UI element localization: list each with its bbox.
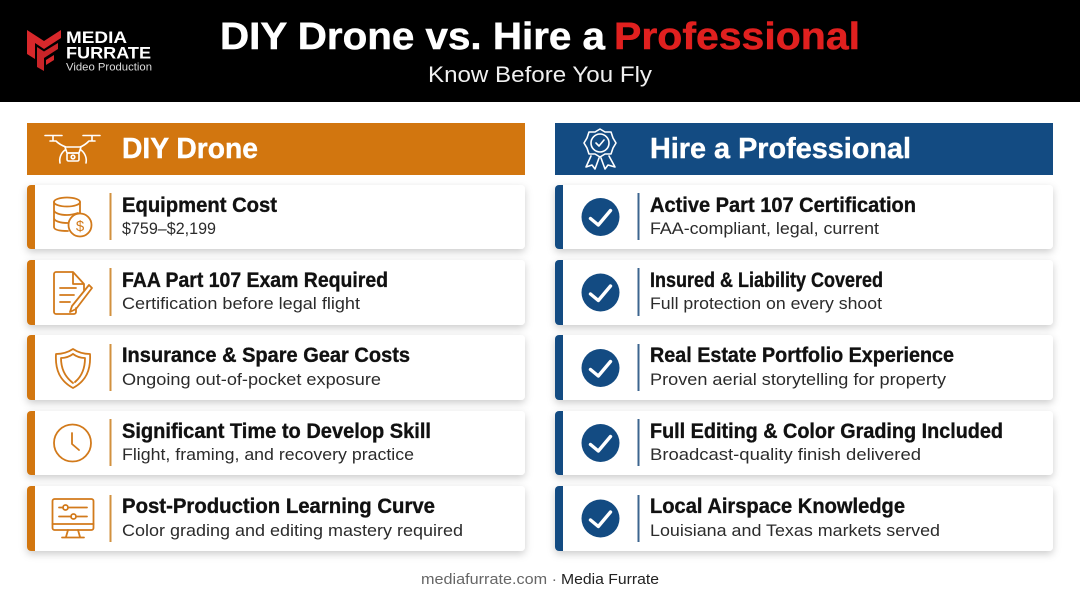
text: Significant Time to Develop Skill <box>122 420 431 443</box>
icon: document and pencil <box>54 272 92 314</box>
header band <box>0 0 1080 102</box>
heading: DIY Drone: DIY Drone <box>122 133 258 165</box>
text: Proven aerial storytelling for property <box>650 370 947 389</box>
card: Real Estate <box>555 335 1053 400</box>
text: Full Editing & Color Grading Included <box>650 420 1003 443</box>
logo mark <box>27 30 61 71</box>
icon: award ribbon <box>584 129 616 169</box>
heading: Hire a Professional <box>555 123 1053 175</box>
logo wordmark: FURRATE <box>66 44 151 62</box>
text <box>650 269 883 313</box>
footer <box>421 571 659 588</box>
text: Equipment Cost <box>122 194 277 217</box>
text: Insured & Liability Covered <box>650 269 883 292</box>
text: Insurance & Spare Gear Costs <box>122 344 410 367</box>
text <box>122 194 277 238</box>
icon: shield <box>56 349 90 388</box>
icon: coins <box>54 198 92 236</box>
text: Broadcast-quality finish delivered <box>650 445 921 464</box>
panel: Hire a Professional <box>555 123 1053 551</box>
icon: monitor with sliders <box>52 499 94 538</box>
text: $759–$2,199 <box>122 219 216 238</box>
text: Active Part 107 Certification <box>650 194 916 217</box>
text: Ongoing out-of-pocket exposure <box>122 370 381 389</box>
text <box>122 344 410 389</box>
card: Local Airspace <box>555 486 1053 551</box>
text <box>122 420 431 464</box>
logo wordmark: MEDIA <box>66 28 127 47</box>
text <box>650 194 916 238</box>
icon: drone <box>45 136 100 163</box>
text <box>122 495 463 540</box>
text <box>650 344 954 389</box>
text: FAA-compliant, legal, current <box>650 219 879 238</box>
text: Real Estate Portfolio Experience <box>650 344 954 367</box>
text <box>122 269 388 313</box>
card: Full Editing <box>555 411 1053 475</box>
panel: DIY Drone <box>27 123 525 551</box>
card: Equipment Cost <box>27 185 525 249</box>
footer: Media Furrate <box>561 571 659 588</box>
heading: DIY Drone <box>27 123 525 175</box>
card: Insurance <box>27 335 525 400</box>
title: DIY Drone vs. Hire a <box>220 16 606 58</box>
text: FAA Part 107 Exam Required <box>122 269 388 292</box>
footer: mediafurrate.com · <box>421 571 557 588</box>
card: Time to Develop Skill <box>27 411 525 475</box>
text <box>650 420 1003 464</box>
text: Post-Production Learning Curve <box>122 495 435 518</box>
icon: check <box>582 349 620 387</box>
heading: Hire a Professional: Hire a Professional <box>650 133 911 165</box>
card: Insured <box>555 260 1053 325</box>
card: Post-Production <box>27 486 525 551</box>
title highlight: Professional <box>614 16 860 58</box>
text: Full protection on every shoot <box>650 294 882 313</box>
icon: check <box>582 424 620 462</box>
text: Certification before legal flight <box>122 294 360 313</box>
text <box>650 495 940 540</box>
icon: check <box>582 274 620 312</box>
text: Local Airspace Knowledge <box>650 495 905 518</box>
icon: clock <box>54 424 91 462</box>
subtitle: Know Before You Fly <box>428 62 652 87</box>
logo wordmark: Video Production <box>66 62 152 74</box>
text: Louisiana and Texas markets served <box>650 521 940 540</box>
logo <box>27 28 152 74</box>
icon: coins: $ <box>76 218 85 235</box>
logo wordmark <box>66 28 152 74</box>
card: FAA Part 107 Exam <box>27 260 525 325</box>
card: Active Part 107 <box>555 185 1053 249</box>
icon: check <box>582 500 620 538</box>
text: Color grading and editing mastery required <box>122 521 463 540</box>
icon: check <box>582 198 620 236</box>
text: Flight, framing, and recovery practice <box>122 445 414 464</box>
